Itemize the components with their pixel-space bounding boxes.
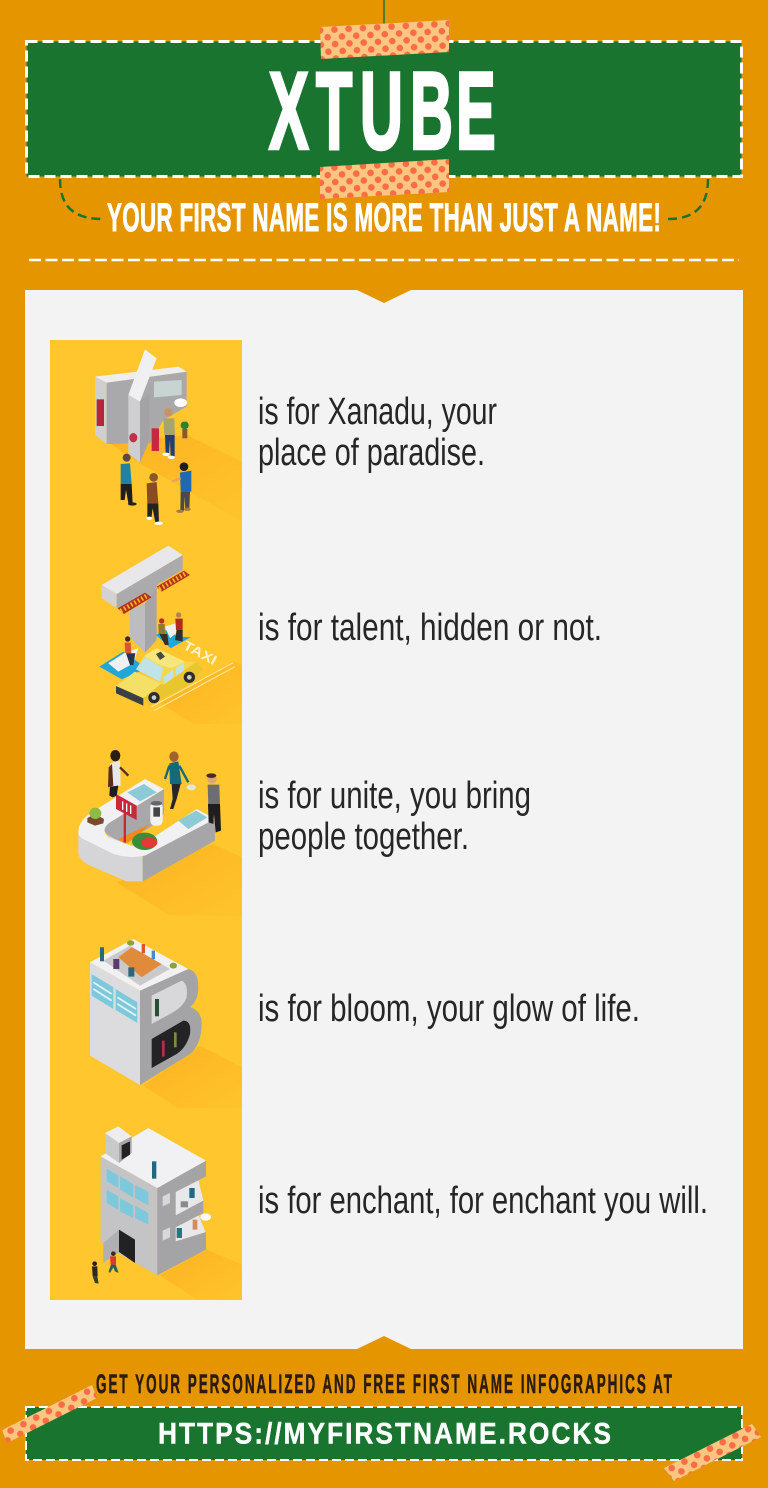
balcony figures <box>177 1188 211 1238</box>
footer url: HTTPS://MYFIRSTNAME.ROCKS <box>158 1416 611 1450</box>
person: man in vest <box>206 773 221 832</box>
trash can <box>150 801 163 826</box>
figures on roof <box>100 940 177 977</box>
title: XTUBE: XTUBE <box>269 49 496 172</box>
subtitle: YOUR FIRST NAME IS MORE THAN JUST A NAME! <box>107 195 661 240</box>
plant box <box>87 808 104 826</box>
text: U line: is for unite, you bring <box>258 775 531 817</box>
climbers <box>162 1032 177 1057</box>
person: woman teal jacket <box>165 751 196 809</box>
tape: footer left <box>2 1385 97 1443</box>
text: X line: place of paradise. <box>258 432 485 474</box>
striped awning right <box>157 571 190 592</box>
text: B line: is for bloom, your glow of life. <box>258 988 640 1030</box>
rooftop figure <box>152 1161 156 1179</box>
icon: letter T taxi stand <box>99 546 242 724</box>
person: man in blue vest <box>172 462 191 513</box>
left curved connector <box>60 179 103 219</box>
taxi <box>116 648 203 706</box>
person: standing man <box>175 612 183 642</box>
restaurant sign <box>116 794 137 842</box>
person: man in brown <box>146 473 163 525</box>
person: man in teal <box>121 454 137 506</box>
icon: letter X building <box>95 349 242 525</box>
icon: letter E building <box>92 1126 242 1300</box>
text: X line: is for Xanadu, your <box>258 391 497 433</box>
meeting table <box>118 947 162 977</box>
text: T line: is for talent, hidden or not. <box>258 607 602 649</box>
text: U line: people together. <box>258 816 469 858</box>
entrance door <box>119 1230 135 1263</box>
tape: footer right <box>664 1424 761 1481</box>
panel: content sheet <box>25 290 743 1349</box>
striped awning left <box>118 593 152 614</box>
people at entrance <box>92 1251 119 1284</box>
taxi road label: TAXI <box>181 638 219 668</box>
icon: letter B building <box>90 939 242 1108</box>
windows <box>107 1169 148 1225</box>
title banner <box>26 42 742 176</box>
dashed separator <box>29 259 739 261</box>
watermelon <box>132 833 157 850</box>
tape: banner bottom <box>320 159 449 199</box>
panel: yellow illustration strip <box>50 340 242 1300</box>
person: woman white top <box>108 750 128 797</box>
tape: banner top <box>320 20 449 59</box>
person: seated man right <box>158 618 169 645</box>
person: man with extinguisher <box>162 408 175 459</box>
person: seated man left <box>125 636 135 665</box>
figure in window <box>155 999 159 1016</box>
footer call to action: GET YOUR PERSONALIZED AND FREE FIRST NAME INFOGRAPHICS AT <box>96 1369 672 1399</box>
footer banner <box>26 1407 742 1460</box>
road markings <box>152 663 235 711</box>
icon: letter U counter <box>78 750 242 916</box>
right curved connector <box>668 179 708 219</box>
hanging string <box>383 0 385 24</box>
